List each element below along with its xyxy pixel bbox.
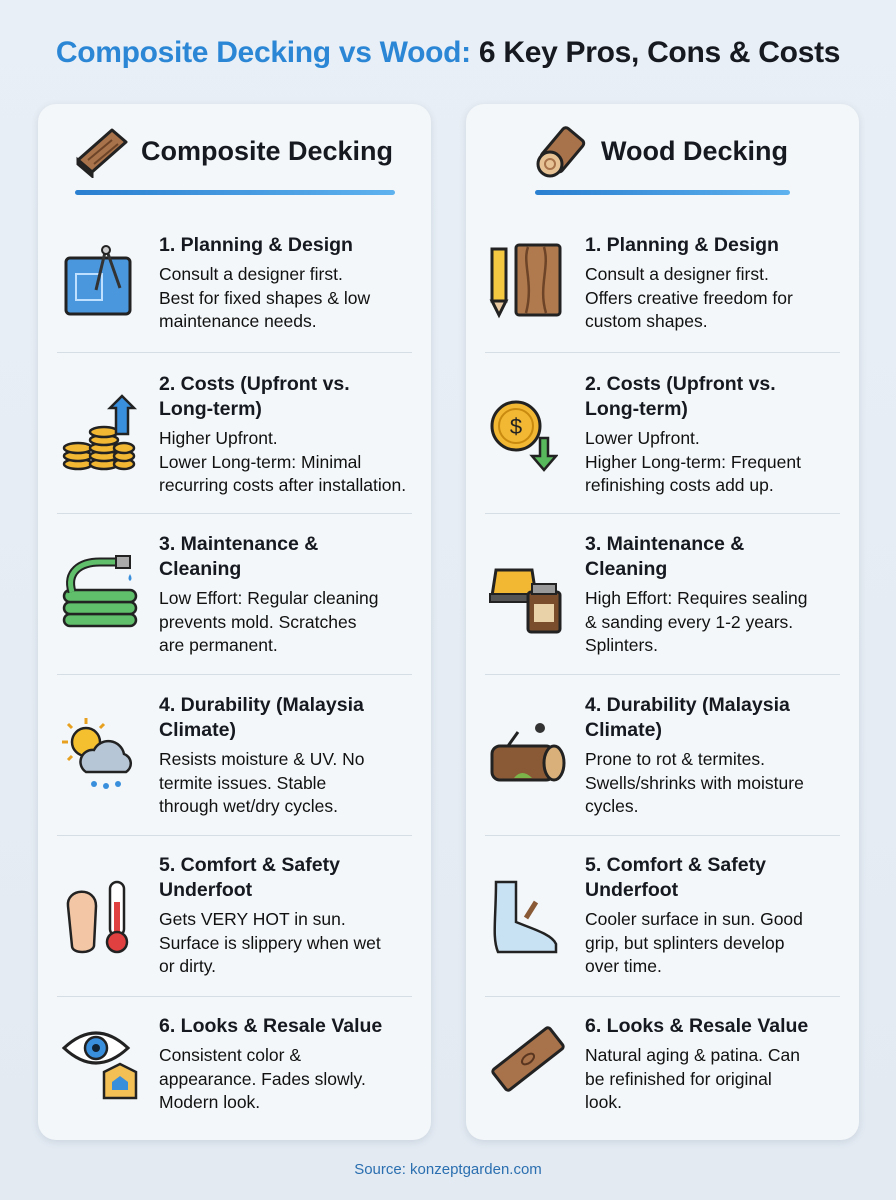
row 2 wood — [585, 373, 801, 495]
row 6 composite: Modern look. — [159, 1092, 260, 1112]
icon: hose — [62, 555, 138, 628]
row 3 composite — [159, 533, 379, 655]
row 4 wood — [585, 694, 804, 816]
icon: foot thermometer — [66, 880, 128, 954]
row 3 composite: Cleaning — [159, 558, 241, 580]
row 2 wood: Long-term) — [585, 398, 688, 420]
row 4 wood: Prone to rot & termites. — [585, 749, 765, 769]
row 3 composite: Low Effort: Regular cleaning — [159, 588, 379, 608]
row 1 wood — [585, 234, 793, 331]
row 3 wood: High Effort: Requires sealing — [585, 588, 807, 608]
row 6 composite — [159, 1015, 382, 1112]
row 4 wood: cycles. — [585, 796, 638, 816]
row 3 composite: 3. Maintenance & — [159, 533, 318, 555]
row 1 composite: Consult a designer first. — [159, 264, 343, 284]
icon: coin down — [490, 400, 558, 472]
row 3 composite: are permanent. — [159, 635, 278, 655]
row 1 composite — [159, 234, 370, 331]
icon: coin down: $ — [510, 414, 522, 439]
icon: sun cloud rain — [62, 718, 132, 789]
row 2 wood: 2. Costs (Upfront vs. — [585, 373, 776, 395]
row 5 wood: Underfoot — [585, 879, 678, 901]
row 3 wood: & sanding every 1-2 years. — [585, 612, 793, 632]
row 2 composite: Higher Upfront. — [159, 428, 278, 448]
icon: coins up — [62, 394, 137, 470]
row 5 wood: 5. Comfort & Safety — [585, 854, 766, 876]
row 6 wood: be refinished for original — [585, 1068, 772, 1088]
row 2 composite: Lower Long-term: Minimal — [159, 452, 361, 472]
row 1 composite: maintenance needs. — [159, 311, 317, 331]
row 1 wood: Consult a designer first. — [585, 264, 769, 284]
row 5 composite: Surface is slippery when wet — [159, 932, 381, 952]
icon: composite board — [76, 128, 128, 178]
panel: composite — [38, 104, 431, 1140]
row 5 composite: Gets VERY HOT in sun. — [159, 909, 346, 929]
row 4 composite — [159, 694, 365, 816]
icon: rotten log — [490, 723, 566, 782]
row 5 wood: Cooler surface in sun. Good — [585, 909, 803, 929]
row 4 wood: Swells/shrinks with moisture — [585, 772, 804, 792]
heading: composite: Composite Decking — [141, 136, 393, 166]
heading: wood: Wood Decking — [601, 136, 788, 166]
title: Composite Decking vs Wood: 6 Key Pros, Cons & Costs — [56, 36, 840, 69]
row 6 composite: 6. Looks & Resale Value — [159, 1015, 382, 1037]
row 4 wood: 4. Durability (Malaysia — [585, 694, 790, 716]
icon: blueprint — [64, 245, 132, 316]
row 3 wood: Splinters. — [585, 635, 658, 655]
row 3 wood: 3. Maintenance & — [585, 533, 744, 555]
row 6 wood: Natural aging & patina. Can — [585, 1045, 800, 1065]
row 5 composite: 5. Comfort & Safety — [159, 854, 340, 876]
panel: wood — [466, 104, 859, 1140]
icon: foot splinter — [493, 880, 558, 954]
row 6 composite: appearance. Fades slowly. — [159, 1068, 366, 1088]
row 2 composite — [159, 373, 406, 495]
row 5 wood — [585, 854, 803, 976]
icon: wood plank — [491, 1026, 565, 1092]
source: Source: konzeptgarden.com — [354, 1161, 542, 1178]
row 5 composite — [159, 854, 381, 976]
row 5 composite: or dirty. — [159, 956, 216, 976]
row 4 composite: 4. Durability (Malaysia — [159, 694, 364, 716]
row 2 wood: Lower Upfront. — [585, 428, 700, 448]
row 4 wood: Climate) — [585, 719, 662, 741]
row 3 composite: prevents mold. Scratches — [159, 612, 356, 632]
row 4 composite: Resists moisture & UV. No — [159, 749, 365, 769]
icon: wood log — [536, 126, 586, 178]
row 6 wood: look. — [585, 1092, 622, 1112]
row 1 wood: 1. Planning & Design — [585, 234, 779, 256]
row 3 wood: Cleaning — [585, 558, 667, 580]
row 6 wood: 6. Looks & Resale Value — [585, 1015, 808, 1037]
row 1 composite: 1. Planning & Design — [159, 234, 353, 256]
row 2 wood: refinishing costs add up. — [585, 475, 774, 495]
row 2 composite: Long-term) — [159, 398, 262, 420]
row 1 wood: Offers creative freedom for — [585, 288, 793, 308]
row 2 wood: Higher Long-term: Frequent — [585, 452, 801, 472]
row 5 wood: grip, but splinters develop — [585, 932, 784, 952]
row 2 composite: 2. Costs (Upfront vs. — [159, 373, 350, 395]
row 2 composite: recurring costs after installation. — [159, 475, 406, 495]
icon: eye tag — [62, 1031, 138, 1100]
row 6 wood — [585, 1015, 808, 1112]
row 4 composite: Climate) — [159, 719, 236, 741]
icon: sander and can — [489, 568, 562, 634]
row 4 composite: through wet/dry cycles. — [159, 796, 338, 816]
row 4 composite: termite issues. Stable — [159, 772, 326, 792]
row 1 composite: Best for fixed shapes & low — [159, 288, 370, 308]
row 6 composite: Consistent color & — [159, 1045, 301, 1065]
row 3 wood — [585, 533, 807, 655]
row 5 wood: over time. — [585, 956, 662, 976]
row 1 wood: custom shapes. — [585, 311, 708, 331]
icon: pencil wood — [490, 244, 562, 318]
row 5 composite: Underfoot — [159, 879, 252, 901]
